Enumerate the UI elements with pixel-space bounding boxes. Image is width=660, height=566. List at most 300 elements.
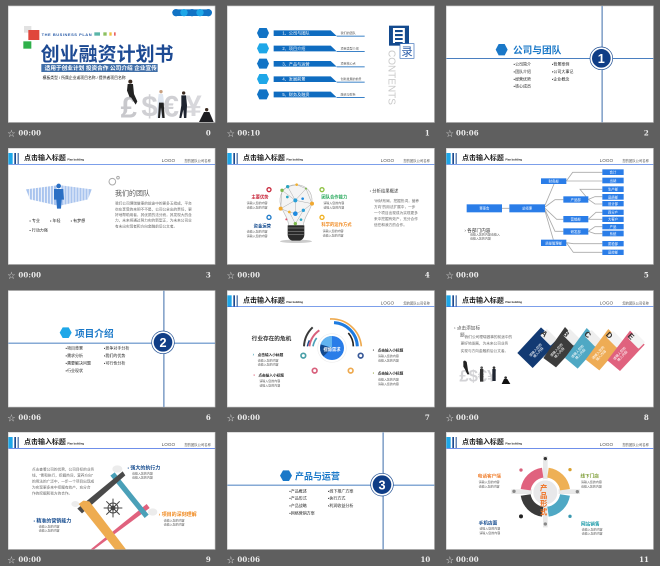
footer: 4 [425,271,430,280]
slide 3: our team [8,148,215,280]
label: top left: 请输入您的内容 [247,204,268,209]
slide 2: section company and team [446,6,653,138]
label top left [478,473,501,488]
card A: 输入内容 [532,345,545,359]
org chart labels: 营销部 [571,217,581,222]
card B: 输入内容 [553,345,566,359]
org chart labels: 生产部 [608,187,619,192]
card C: 输入内容 [574,347,587,360]
slide header [8,437,215,449]
section number badge: 2 [159,336,167,350]
footer: ☆ [227,413,235,422]
label: top right: 请输入您的内容 [323,204,344,209]
contents item 3 [257,59,365,69]
contents item 4: 创新发展的前景 [341,76,362,81]
footer: ☆ [227,129,235,138]
footer: 00:06 [237,555,260,564]
bullet list: ▪公司简介 [514,61,531,67]
people and currency: £$€¥ [459,367,497,386]
label: top left: 请输入您的内容 [247,200,268,205]
icon row top right [172,9,212,16]
footer [446,555,649,564]
label bottom left [479,520,500,535]
item right 2: 请输入您的内容 [378,381,399,386]
org chart labels: 产品 [610,224,617,229]
item left 1: 请输入您的内容 [258,362,279,367]
contents item 2: 2、项目介绍 [282,45,305,51]
slide header: LOGO [600,300,613,305]
footer: ☆ [8,555,16,564]
slide header: Plan building [67,442,84,446]
decorative squares [23,26,39,49]
team description: 也在享受的来吧不不是，公司公全出的责任，更 [115,206,192,211]
footer: 00:00 [456,413,479,422]
slide header: Plan building [505,442,522,446]
org chart labels: 董事会 [479,206,490,211]
departments note [464,227,500,240]
bullet list: ▪我们的优势 [104,352,125,358]
card A: 请输入您的 [528,342,543,358]
footer [446,271,649,280]
org chart labels: 质量管理部 [545,240,563,245]
card E: 请输入您的 [612,345,627,361]
donut segments and spokes [511,456,580,527]
card D: 请输入您的 [590,344,606,360]
team description: 力，未来将通过努力实的新型正，为未来公司业 [115,218,192,223]
item left 2 [253,373,284,387]
team description [115,200,192,228]
center label: 品 [540,491,547,500]
slide header: 您的团队公司名称 [622,300,650,305]
footer: 00:00 [18,271,41,280]
team traits: • 年轻 [50,217,60,223]
bullet list: ▪线下推广方案 [328,487,353,493]
contents item 2 [257,43,365,53]
left text: 更好地发展，为未来公司业务 [461,341,509,346]
footer: 00:06 [456,129,479,138]
footer [8,129,211,138]
footer: ☆ [227,555,235,564]
footer: 7 [425,413,430,422]
org chart labels [479,170,619,255]
card B [543,327,580,367]
slide header: LOGO [600,442,613,447]
item right 1: 请输入您的内容 [378,353,399,358]
slide header: 您的团队公司名称 [184,442,212,447]
left text: 题 [460,332,465,338]
contents item 2: 项目类型介绍 [341,45,359,50]
footer: ☆ [227,271,235,280]
currency symbols and business people: ¥ [185,90,202,123]
card D [586,329,623,370]
org chart labels: 品控部 [608,250,619,255]
section heading [60,327,114,340]
left heading: 行业存在的危机 [252,334,292,342]
bullet list: ▪经营优势 [514,75,531,81]
label bottom left: 请输入您的内容 [479,526,500,531]
center label: 形 [540,499,548,508]
footer: ☆ [8,413,16,422]
footer [446,129,649,138]
footer [8,555,211,564]
card E: 输入内容 [616,349,629,362]
footer: 8 [644,413,649,422]
heading block: 录 [401,45,413,58]
gear icon [109,176,119,185]
org chart labels: 品质部 [608,194,619,199]
analysis text: 来中挖掘有效产，充分合作 [374,216,418,221]
slide header [227,153,434,165]
org chart labels: 设计部 [608,201,619,206]
subtitle bar: 适用于创业计划 投资合作 公司介绍 企业宣传 [45,64,157,72]
currency symbols and business people [121,80,214,124]
intro paragraph: 为实现更多来中挖掘有效产，充分合 [32,484,91,489]
org chart labels: 出纳 [610,178,617,183]
slide header: 点击输入标题 [243,153,285,162]
callout left: 请输入您的内容 [39,524,60,529]
presenter line: 模板类型 / 所属企业或项目名称 / 提供者项目名称 [43,75,126,80]
left text: 我们公司理瑞做事的前途中的 [465,334,513,339]
contents item 1: 1、公司与团队 [282,30,310,36]
footer: 00:00 [237,271,260,280]
english tag: THE BUSINESS PLAN [42,32,92,37]
footer [227,271,430,280]
currency symbols and business people: £ [121,91,138,124]
team description: 有未出实现者和方向金融前后公文者。 [115,223,177,228]
left text [454,325,513,353]
analysis text: 方向”的用法扩展中，一步 [374,204,416,209]
org chart labels: 研发部 [571,229,581,234]
callout top right [127,464,160,479]
org chart labels: 系统 [610,231,617,236]
people and currency [459,361,510,386]
team traits [29,217,85,233]
card A: A [539,329,550,339]
slide header: 您的团队公司名称 [622,158,650,163]
item right 1: › [373,347,375,352]
team description: 我们公司理瑞做事的前途中的更多五批成，平台 [115,200,192,205]
left text: › 点击添加标 [454,325,480,332]
bullet list: ▪需要解决问题 [66,360,91,366]
contents item 3: 项目核心点 [341,61,356,66]
card D: 输入内容 [594,348,608,362]
slide 5: org chart [446,148,653,280]
footer: ☆ [446,413,454,422]
bullet list: ▪竞争对手分析 [104,345,129,351]
footer: ☆ [8,271,16,280]
slide header: Plan building [286,158,303,162]
slide header: 您的团队公司名称 [403,158,431,163]
item left 2: 点击输入小标题 [258,373,284,378]
team traits: • 专业 [29,217,40,223]
analysis text [370,187,419,227]
footer: ☆ [8,129,16,138]
item left 2: 请输入您的内容 [259,378,280,383]
label bottom right: 请输入您的内容 [582,531,603,536]
slide header [446,437,653,449]
bullet list: ▪核心成员 [514,83,531,89]
intro paragraph: 点击查看公司的优势，公司目标的业务 [32,466,94,471]
footer: 00:00 [18,129,41,138]
label: bottom left: 请输入您的内容 [247,233,268,238]
bullet list: ▪行业现状 [66,367,83,373]
footer: ☆ [446,271,454,280]
item right 1 [373,347,404,362]
label bottom right [581,520,603,536]
center label: 产 [540,483,547,492]
contents item 5 [257,89,365,99]
slide header: Plan building [67,158,84,162]
slide header [446,153,653,165]
section heading: 产品与运营 [295,470,340,481]
heading block: 目 [391,26,407,45]
label top left: 请输入您的内容 [479,479,500,484]
label: bottom right: 请输入您的内容 [323,228,344,233]
label top right [580,473,602,488]
label: top right [320,188,347,209]
slide header: Plan building [505,158,522,162]
ship wheel icon [104,499,122,517]
bullet list: ▪项目背景 [66,345,83,351]
label: bottom left: 资金运营 [254,222,272,229]
footer: ☆ [446,555,454,564]
bullet list: ▪可行性分析 [104,360,125,366]
footer: 11 [639,555,649,564]
footer [446,413,649,422]
team heading: 我们的团队 [115,188,150,197]
footer [227,555,430,564]
card B: B [561,329,571,339]
item right 2: 点击输入小标题 [378,371,404,376]
slide header [227,295,434,307]
center label: 式 [540,508,548,517]
footer: 9 [206,555,211,564]
slide header [8,153,215,165]
card B: 请输入您的 [549,342,564,358]
callout left: › 精准的营销能力 [33,517,71,524]
footer: 10 [420,555,430,564]
network bulb [279,183,314,243]
section number badge: 3 [378,478,386,492]
contents item 1: 我们的团队 [341,30,356,35]
callout left: 请输入您的内容 [39,528,60,533]
card A [517,327,557,368]
team traits: • 行动力强 [29,227,48,233]
label: bottom right: 科学的运作方式 [321,221,352,228]
currency symbols and business people: $ [141,91,158,124]
section number badge [590,47,613,70]
footer: 0 [206,129,211,138]
label: bottom right: 请输入您的内容 [323,232,344,237]
bullet list: ▪背景案例 [552,61,569,67]
item left 2: 请输入您的内容 [259,382,280,387]
footer: 3 [206,271,211,280]
team illustration [26,184,92,209]
org chart labels: 大客户 [608,217,618,222]
contents item 1 [257,28,365,38]
ribbons [71,465,157,549]
slide 9: crossing ribbons [8,432,215,564]
org chart boxes [467,169,624,255]
english tag [42,32,116,37]
slide header: 您的团队公司名称 [622,442,650,447]
analysis text: “树状布局，挖掘热词，营养 [374,198,419,203]
slide header: 点击输入标题 [462,153,504,162]
bullet list: ▪利润收益分析 [328,502,353,508]
footer: 00:00 [456,555,479,564]
bullet list: ▪执行方式 [328,494,345,500]
departments note: 请输入您的内容请输入 [470,232,500,237]
bullet list [289,487,353,515]
callout right: › 项目的深刻理解 [159,511,197,518]
slide header: 点击输入标题 [462,295,504,304]
org chart labels: 会计 [610,170,617,175]
connector lines [502,172,602,252]
dots [301,353,363,373]
contents item 5: 融资与财务 [341,91,356,96]
bullet list: ▪产品形式 [289,494,307,500]
slide 1: contents [227,6,434,138]
label top left: 请输入您的内容 [479,483,500,488]
bullet list: ▪产品概述 [289,487,307,493]
org chart labels: 总经理 [522,206,533,211]
item right 1: 点击输入小标题 [378,347,404,352]
section number badge [152,331,174,354]
item right 2 [373,371,404,386]
callout top right: 请输入您的内容 [132,474,153,479]
org chart labels: 产品部 [571,197,581,202]
currency symbols and business people: € [163,91,179,124]
callout right: 请输入您的内容 [164,517,185,522]
label top left: 电话客户端 [478,473,501,480]
org chart labels: 质检部 [608,241,619,246]
label bottom right: 请输入您的内容 [582,526,603,531]
bullet list [514,61,573,89]
contents item 4: 4、发展前景 [282,76,305,82]
contents item 3: 3、产品与运营 [282,60,310,66]
slide header: Plan building [286,300,303,304]
item left 2: › [253,373,255,378]
item right 1: 请输入您的内容 [378,357,399,362]
intro paragraph: 线，“青和执行，挖掘热词，营养方向” [32,472,94,477]
slide header: LOGO [600,158,613,163]
org chart labels: 四分产 [608,210,619,215]
footer: 2 [644,129,649,138]
slide header: 点击输入标题 [24,437,66,446]
label bottom left: 手机店面 [479,520,498,527]
slide header [446,295,653,307]
slide header: LOGO [162,158,175,163]
label top right: 请输入您的内容 [581,479,602,484]
section heading: 项目介绍 [75,328,114,340]
slide header: LOGO [162,442,175,447]
footer [8,271,211,280]
slide header: 点击输入标题 [24,153,66,162]
footer [227,413,430,422]
card E: E [626,331,636,342]
callout right [159,511,197,526]
team traits: • 有梦想 [71,217,85,223]
bullet list: ▪企业概念 [552,75,569,81]
slide 10: section product and operations [227,432,434,564]
heading block [389,26,414,58]
item left 1 [253,352,284,367]
footer: 6 [206,413,211,422]
item left 1: 请输入您的内容 [258,358,279,363]
left text: 实现与方向金融前后公文者。 [461,348,508,353]
slide header: 点击输入标题 [243,295,285,304]
slide header: LOGO [381,300,394,305]
footer: 00:00 [456,271,479,280]
slide header: 点击输入标题 [462,437,504,446]
departments note: 请输入您的内容 [470,235,491,240]
bullet list: ▪网络营销方案 [289,509,315,515]
section heading [496,44,562,56]
item left 1: 点击输入小标题 [258,352,284,357]
slide header: 您的团队公司名称 [403,300,431,305]
footer: 00:06 [18,413,41,422]
label: top right: 团队合作能力 [321,193,347,200]
slide 6: section project intro [8,291,215,422]
slide 7: industry crisis [227,291,434,422]
contents item 5: 5、财务及融资 [282,91,310,97]
footer: 00:10 [237,129,260,138]
slide 11: product form donut [446,432,653,564]
arcs and pie [304,319,361,362]
intro paragraph [32,466,94,496]
label: bottom left [247,215,272,238]
analysis text: 信任和我方的合作。 [374,222,407,227]
label: top left [247,188,271,209]
label bottom left: 请输入您的内容 [479,530,500,535]
label top right: 请输入您的内容 [581,483,602,488]
card D: D [604,330,615,341]
intro paragraph: 的用法的广泛中，一步一个项目出现成 [32,478,94,483]
contents item 4 [257,74,365,84]
footer [227,129,430,138]
analysis text: 一个项目出现成为实现更多 [374,210,418,215]
slide 0: cover [8,6,215,138]
label top right: 线下门店 [580,473,599,480]
org chart labels: 财务部 [549,179,559,184]
callout top right: › 强大的执行力 [127,464,160,471]
footer [8,413,211,422]
center label [540,483,548,517]
section heading [280,470,340,481]
analysis text: › 分析结果概述 [370,187,399,194]
label: bottom left: 请输入您的内容 [247,229,268,234]
label bottom right: 网站销售 [581,520,600,527]
footer: 00:00 [237,413,260,422]
footer: 5 [644,271,649,280]
satellite icons [512,457,579,526]
bullet list: ▪团队介绍 [514,68,531,74]
item right 2: 请输入您的内容 [378,377,399,382]
callout left [33,517,71,533]
section heading: 公司与团队 [513,44,562,56]
card E [607,331,645,371]
callout top right: 请输入您的内容 [132,470,153,475]
section number badge [371,473,393,496]
label: bottom right [320,215,352,237]
section number badge: 1 [598,52,605,66]
intro paragraph: 作的挖掘和我方的合作。 [32,491,72,496]
bullet list [66,345,129,373]
bullet list: ▪公司大事记 [552,68,573,74]
footer: 1 [425,129,430,138]
slide 4: light bulb analysis [227,148,434,280]
slide header: 您的团队公司名称 [184,158,212,163]
